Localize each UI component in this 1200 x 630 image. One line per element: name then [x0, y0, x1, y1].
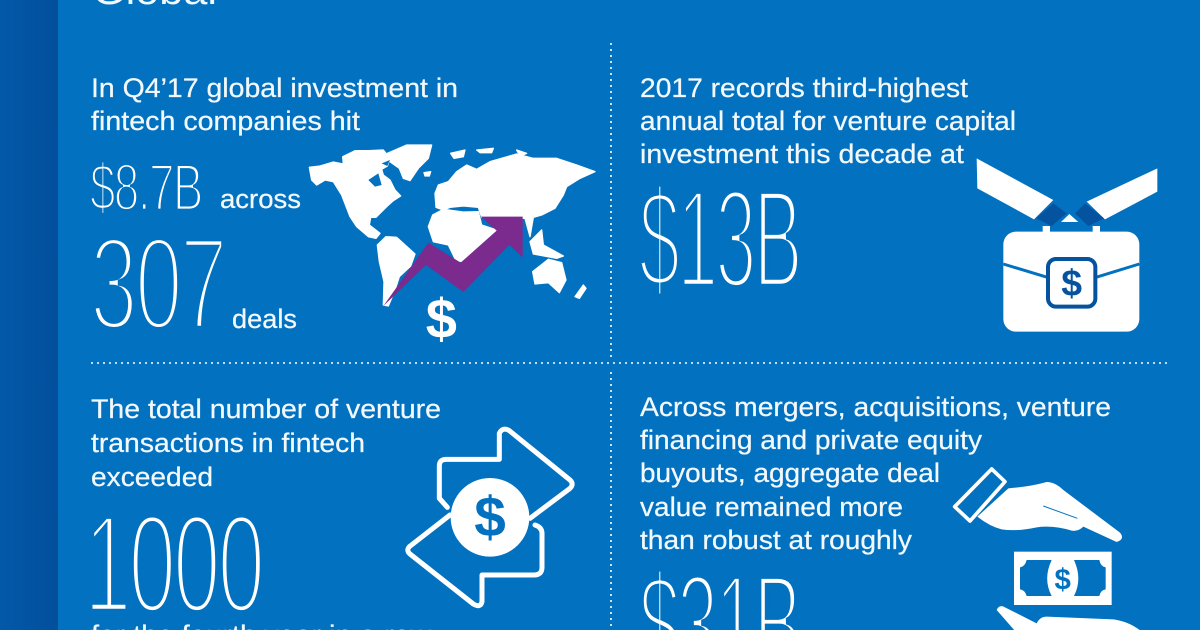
stat: $8.7B: $8.7B: [90, 150, 202, 224]
small lakes and bays: [368, 160, 390, 187]
text: investment intro: fintech companies hit: [91, 106, 361, 136]
left sidebar strip: [0, 0, 58, 630]
text: venture capital intro: [640, 73, 1016, 169]
text: venture capital intro: investment this decade at: [640, 139, 965, 169]
label: deals: deals: [232, 304, 297, 334]
icon: exchange arrows with dollar: $: [474, 487, 506, 550]
arrow: [383, 217, 523, 306]
text: aggregate deal intro: financing and private equity: [640, 425, 983, 455]
label: across: across: [220, 184, 301, 214]
text: venture capital intro: 2017 records third-highest: [640, 73, 969, 103]
stat: 307: 307: [90, 210, 225, 357]
panel: global investment: [90, 73, 595, 357]
icon: briefcase: [977, 158, 1157, 332]
icon: exchange arrows with dollar: [408, 429, 572, 606]
text: aggregate deal intro: buyouts, aggregate deal: [640, 458, 940, 488]
panel: aggregate deal value: [639, 392, 1142, 630]
text: investment intro: [91, 73, 458, 136]
icon: world map with rising arrow and dollar sign: [309, 145, 595, 350]
text: transactions intro: exceeded: [91, 462, 213, 492]
text: transactions intro: transactions in fintech: [91, 428, 365, 458]
text: investment intro: In Q4’17 global investment in: [91, 73, 458, 103]
text: transactions intro: [91, 394, 441, 492]
icon: hands protecting banknote: $: [1055, 563, 1071, 596]
text: aggregate deal intro: value remained more: [640, 492, 903, 522]
text: aggregate deal intro: Across mergers, acquisitions, venture: [640, 392, 1111, 422]
panel: venture transactions: [84, 394, 572, 630]
text: transactions intro: The total number of venture: [91, 394, 441, 424]
text: venture capital intro: annual total for venture capital: [640, 106, 1016, 136]
dollar sign: $: [426, 287, 457, 350]
stat: $13B: $13B: [639, 160, 800, 317]
text: aggregate deal intro: than robust at roughly: [640, 525, 913, 555]
icon: hands protecting banknote: [955, 469, 1142, 630]
text: aggregate deal intro: [640, 392, 1111, 555]
icon: briefcase: $: [1061, 261, 1082, 303]
panel: venture capital: [639, 73, 1157, 332]
